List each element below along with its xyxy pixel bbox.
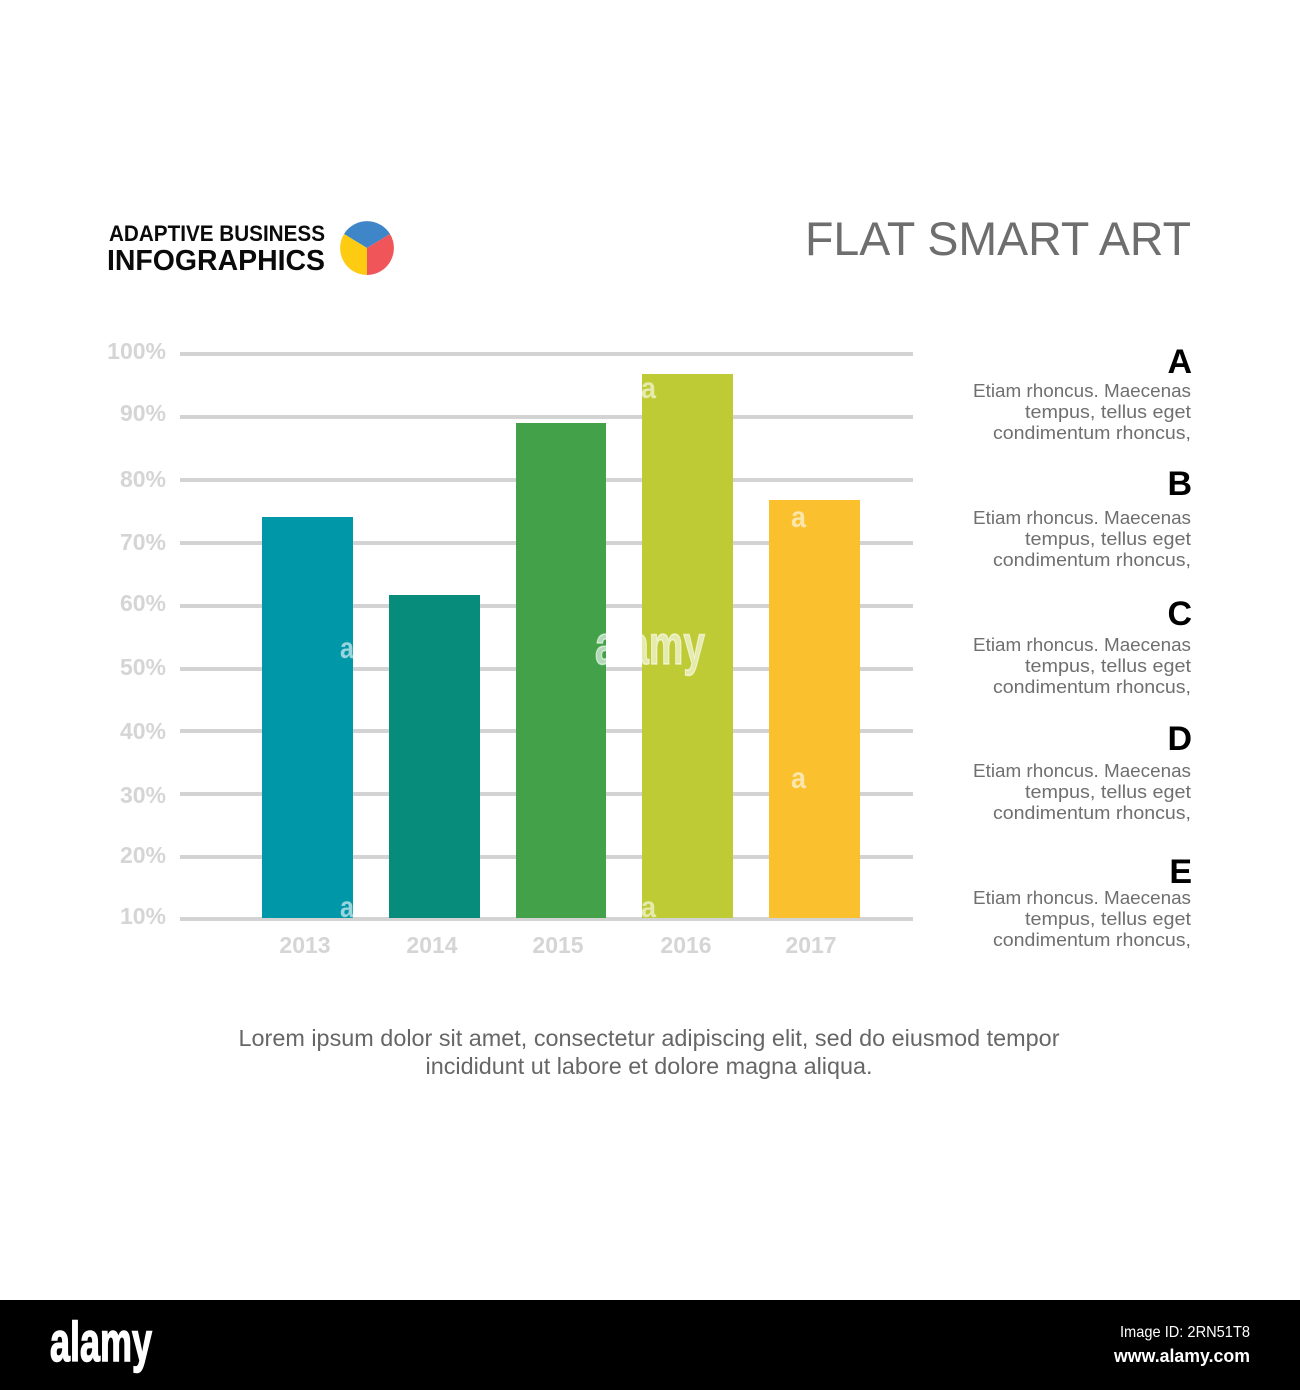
watermark: a [340,891,354,924]
legend item E: condimentum rhoncus, [993,930,1191,950]
caption text [238,1025,1060,1079]
y axis labels: 90% [120,400,166,426]
footer logo: alamy [50,1310,152,1373]
title: FLAT SMART ART [805,212,1191,265]
website: www.alamy.com [1113,1346,1250,1366]
watermark: a [340,632,354,665]
icon: pie chart [340,221,394,275]
x axis labels: 2014 [406,932,458,958]
y axis labels [107,338,166,929]
watermark: alamy [595,613,705,676]
logo text: INFOGRAPHICS [107,245,325,277]
legend item E: tempus, tellus eget [1025,909,1191,929]
x axis labels [279,932,837,958]
legend item D: tempus, tellus eget [1025,782,1191,802]
y axis labels: 70% [120,529,166,555]
y axis labels: 50% [120,654,166,680]
legend [973,343,1192,950]
footer bar [0,1300,1300,1390]
caption text: Lorem ipsum dolor sit amet, consectetur adipiscing elit, sed do eiusmod tempor [238,1025,1060,1051]
legend item C: tempus, tellus eget [1025,656,1191,676]
legend item C: Etiam rhoncus. Maecenas [973,635,1191,655]
legend item C: condimentum rhoncus, [993,677,1191,697]
legend item A [973,343,1192,443]
y axis labels: 30% [120,782,166,808]
legend item C: C [1167,595,1192,633]
watermark [340,372,806,924]
logo text: ADAPTIVE BUSINESS [109,221,325,246]
watermark: a [641,372,656,405]
caption text: incididunt ut labore et dolore magna aliqua. [426,1053,872,1079]
bar chart [107,338,913,958]
legend item E: Etiam rhoncus. Maecenas [973,888,1191,908]
legend item B [973,465,1192,570]
y axis labels: 40% [120,718,166,744]
legend item B: B [1167,465,1192,503]
legend item A: Etiam rhoncus. Maecenas [973,381,1191,401]
legend item A: A [1167,343,1192,381]
legend item C [973,595,1192,697]
legend item D: D [1167,720,1192,758]
x axis labels: 2016 [660,932,712,958]
watermark: a [641,891,656,924]
y axis labels: 60% [120,590,166,616]
legend item B: tempus, tellus eget [1025,529,1191,549]
legend item D: condimentum rhoncus, [993,803,1191,823]
image id: Image ID: 2RN51T8 [1120,1324,1250,1341]
legend item B: Etiam rhoncus. Maecenas [973,508,1191,528]
logo: adaptive business infographics [107,221,394,277]
watermark: a [791,501,806,534]
watermark: a [791,762,806,795]
y axis labels: 80% [120,466,166,492]
y axis labels: 100% [107,338,166,364]
legend item A: condimentum rhoncus, [993,423,1191,443]
legend item B: condimentum rhoncus, [993,550,1191,570]
legend item A: tempus, tellus eget [1025,402,1191,422]
legend item D: Etiam rhoncus. Maecenas [973,761,1191,781]
legend item E [973,853,1192,950]
y axis labels: 10% [120,903,166,929]
x axis labels: 2013 [279,932,331,958]
x axis labels: 2015 [532,932,584,958]
bars [262,374,860,918]
legend item D [973,720,1192,823]
x axis labels: 2017 [785,932,837,958]
legend item E: E [1169,853,1192,891]
logo text [107,221,325,277]
y axis labels: 20% [120,842,166,868]
